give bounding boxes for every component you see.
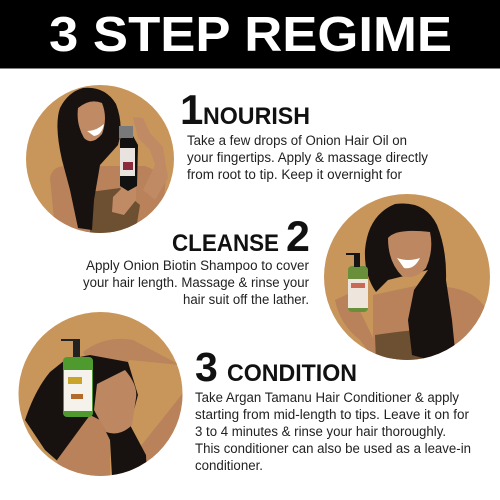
heading: step 3 condition: 3 xyxy=(195,344,218,390)
photo: woman with onion biotin shampoo xyxy=(324,194,490,362)
title banner xyxy=(0,0,500,68)
text: step 1 instructions: your fingertips. Apply & massage directly xyxy=(187,150,428,165)
text: step 2 instructions: hair suit off the lather. xyxy=(183,292,309,307)
text: step 3 instructions: This conditioner can also be used as a leave-in xyxy=(195,441,471,456)
heading: step 1 nourish: NOURISH xyxy=(203,103,310,130)
text: step 1 instructions xyxy=(187,133,428,182)
heading: step 2 cleanse: CLEANSE xyxy=(172,230,279,257)
text: step 2 instructions: your hair length. Massage & rinse your xyxy=(83,275,309,290)
heading: step 2 cleanse xyxy=(172,213,310,261)
heading: step 3 condition: CONDITION xyxy=(227,360,357,387)
text: step 1 instructions: from root to tip. Keep it overnight for xyxy=(187,167,402,182)
text: step 2 instructions xyxy=(83,258,309,307)
text: step 2 instructions: Apply Onion Biotin Shampoo to cover xyxy=(86,258,309,273)
text: step 3 instructions: conditioner. xyxy=(195,458,263,473)
text: step 3 instructions: Take Argan Tamanu Hair Conditioner & apply xyxy=(195,390,459,405)
title banner: 3 STEP REGIME xyxy=(49,8,452,62)
photo: woman with argan tamanu conditioner xyxy=(18,312,183,480)
text: step 3 instructions: 3 to 4 minutes & rinse your hair thoroughly. xyxy=(195,424,446,439)
text: step 3 instructions xyxy=(195,390,471,473)
heading: step 3 condition xyxy=(195,344,357,390)
heading: step 1 nourish xyxy=(180,86,310,133)
photo: woman with onion hair oil xyxy=(26,85,174,240)
text: step 1 instructions: Take a few drops of Onion Hair Oil on xyxy=(187,133,407,148)
heading: step 2 cleanse: 2 xyxy=(286,213,310,261)
text: step 3 instructions: starting from mid-length to tips. Leave it on for xyxy=(195,407,469,422)
heading: step 1 nourish: 1 xyxy=(180,86,203,133)
